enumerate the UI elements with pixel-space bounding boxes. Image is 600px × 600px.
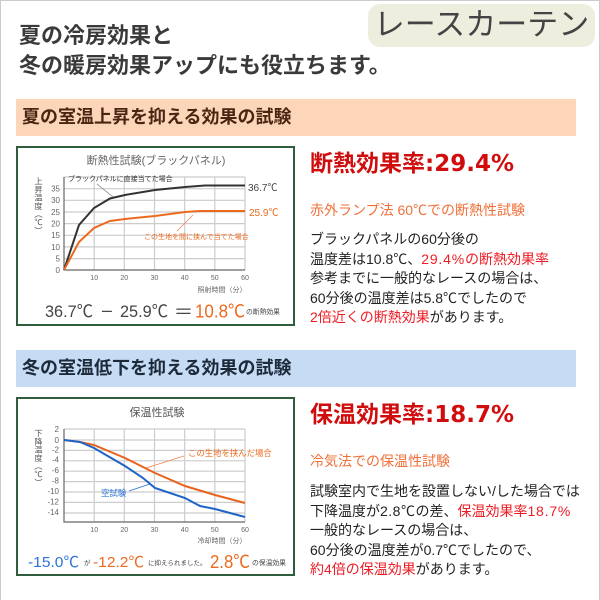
title line 2: 冬の暖房効果アップにも役立ちます。 bbox=[19, 53, 391, 78]
chart title: 保温性試験 bbox=[130, 405, 184, 419]
section heading: winter bbox=[16, 350, 576, 387]
line chart: temperature drop: 下降温度（℃） bbox=[34, 429, 43, 486]
formula: の断熱効果 bbox=[246, 307, 280, 316]
text block: retention description bbox=[310, 483, 580, 577]
rate heading: heat retention: 保温効果率:18.7% bbox=[310, 402, 514, 428]
summary line: -15.0℃ bbox=[28, 554, 79, 571]
panel: winter chart bbox=[16, 397, 295, 576]
empty test line bbox=[64, 440, 245, 517]
line label: fabric: この生地を挟んだ場合 bbox=[188, 448, 272, 458]
line chart: temperature drop: -6 bbox=[52, 466, 60, 475]
line label: empty test: 空試験 bbox=[101, 488, 127, 498]
line chart: temperature rise: 50 bbox=[211, 275, 219, 282]
subheading: insulation test: 赤外ランプ法 60℃での断熱性試験 bbox=[310, 202, 525, 218]
summary line: の保温効果 bbox=[252, 558, 286, 567]
line chart: temperature drop: -4 bbox=[52, 456, 60, 464]
text block: retention description: 試験室内で生地を設置しない/した場合では bbox=[310, 483, 580, 499]
summary line: 2.8℃ bbox=[210, 552, 250, 572]
fabric line bbox=[64, 211, 245, 270]
line chart: temperature rise: 5 bbox=[56, 254, 61, 264]
line chart: temperature drop: 0 bbox=[55, 436, 60, 445]
line chart: temperature rise bbox=[34, 174, 278, 294]
line chart: temperature rise: 10 bbox=[90, 275, 98, 282]
line chart: temperature rise: 20 bbox=[120, 275, 128, 282]
line chart: temperature drop: 10 bbox=[90, 527, 98, 534]
section heading: summer bbox=[16, 99, 576, 136]
line chart: temperature rise: 60 bbox=[241, 275, 249, 282]
line label: fabric: この生地を間に挟んで当てた場合 bbox=[144, 232, 249, 241]
line chart: temperature drop: -12 bbox=[47, 498, 60, 506]
summary line: -12.2℃ bbox=[93, 554, 144, 571]
panel frame bbox=[17, 398, 294, 575]
line chart: temperature rise: 照射時間（分） bbox=[198, 285, 246, 294]
chart title: 断熱性試験(ブラックパネル) bbox=[87, 153, 225, 167]
summary line bbox=[28, 552, 286, 572]
badge: product name: レースカーテン bbox=[374, 7, 589, 42]
title line 1: 夏の冷房効果と bbox=[19, 23, 173, 48]
line chart: temperature drop: 30 bbox=[151, 527, 158, 534]
summary line: が bbox=[84, 558, 91, 567]
panel: summer chart bbox=[16, 146, 295, 326]
formula: 25.9℃ bbox=[120, 302, 168, 321]
rate heading: insulation: 断熱効果率:29.4% bbox=[310, 151, 514, 177]
formula: − bbox=[101, 302, 113, 321]
text block: insulation description: 温度差は10.8℃、29.4%の断熱効果率 bbox=[310, 250, 549, 266]
subheading: retention test: 冷気法での保温性試験 bbox=[310, 453, 450, 469]
line chart: temperature drop: 50 bbox=[211, 527, 219, 534]
formula: 36.7℃ bbox=[45, 302, 93, 321]
line chart: temperature drop: 60 bbox=[241, 527, 249, 534]
text block: retention description: 一般的なレースの場合は、 bbox=[310, 522, 477, 538]
fabric line bbox=[64, 440, 245, 503]
text block: insulation description: 参考までに一般的なレースの場合は、 bbox=[310, 270, 547, 286]
text block: insulation description bbox=[310, 231, 549, 325]
line chart: temperature rise: 20 bbox=[51, 220, 61, 228]
panel frame bbox=[17, 147, 294, 325]
section heading: summer: 夏の室温上昇を抑える効果の試験 bbox=[22, 107, 291, 127]
text block: retention description: 60分後の温度差が0.7℃でしたので、 bbox=[310, 542, 540, 558]
line chart: temperature drop bbox=[34, 425, 272, 545]
text block: insulation description: 2倍近くの断熱効果があります。 bbox=[310, 309, 512, 325]
end value: orange: 25.9℃ bbox=[249, 208, 278, 219]
text block: insulation description: 60分後の温度差は5.8℃でしたので bbox=[310, 290, 527, 306]
end value: black: 36.7℃ bbox=[248, 183, 277, 194]
formula: = bbox=[175, 302, 192, 321]
text block: insulation description: ブラックパネルの60分後の bbox=[310, 231, 479, 247]
line chart: temperature rise: 10 bbox=[51, 243, 61, 252]
line chart: temperature rise: 15 bbox=[51, 231, 61, 240]
formula: 10.8℃ bbox=[195, 302, 245, 322]
line chart: temperature rise: 35 bbox=[51, 184, 61, 194]
line chart: temperature rise: 0 bbox=[56, 266, 61, 275]
line chart: temperature rise: 25 bbox=[51, 208, 61, 217]
formula bbox=[45, 302, 280, 322]
line chart: temperature drop: 20 bbox=[120, 527, 128, 534]
line chart: temperature rise: 上昇温度（℃） bbox=[34, 177, 43, 234]
line chart: temperature drop: -8 bbox=[52, 476, 60, 486]
line chart: temperature rise: 30 bbox=[151, 275, 158, 282]
text block: retention description: 約4倍の保温効果があります。 bbox=[310, 561, 498, 577]
line chart: temperature rise: 40 bbox=[181, 275, 189, 282]
section heading: winter: 冬の室温低下を抑える効果の試験 bbox=[22, 358, 291, 378]
line chart: temperature drop: -2 bbox=[52, 446, 60, 454]
black panel line bbox=[64, 186, 245, 270]
line chart: temperature drop: 40 bbox=[181, 527, 189, 534]
line chart: temperature drop: 冷却時間（分） bbox=[198, 536, 246, 545]
line chart: temperature drop: -10 bbox=[47, 487, 60, 496]
summary line: に抑えられました。 bbox=[148, 558, 206, 567]
line chart: temperature drop: 2 bbox=[55, 425, 60, 434]
line chart: temperature drop: -14 bbox=[47, 508, 60, 517]
line label: black panel: ブラックパネルに直接当てた場合 bbox=[68, 174, 173, 183]
line chart: temperature rise: 30 bbox=[51, 196, 61, 205]
text block: retention description: 下降温度が2.8℃の差、保温効果率18.7% bbox=[310, 502, 571, 518]
